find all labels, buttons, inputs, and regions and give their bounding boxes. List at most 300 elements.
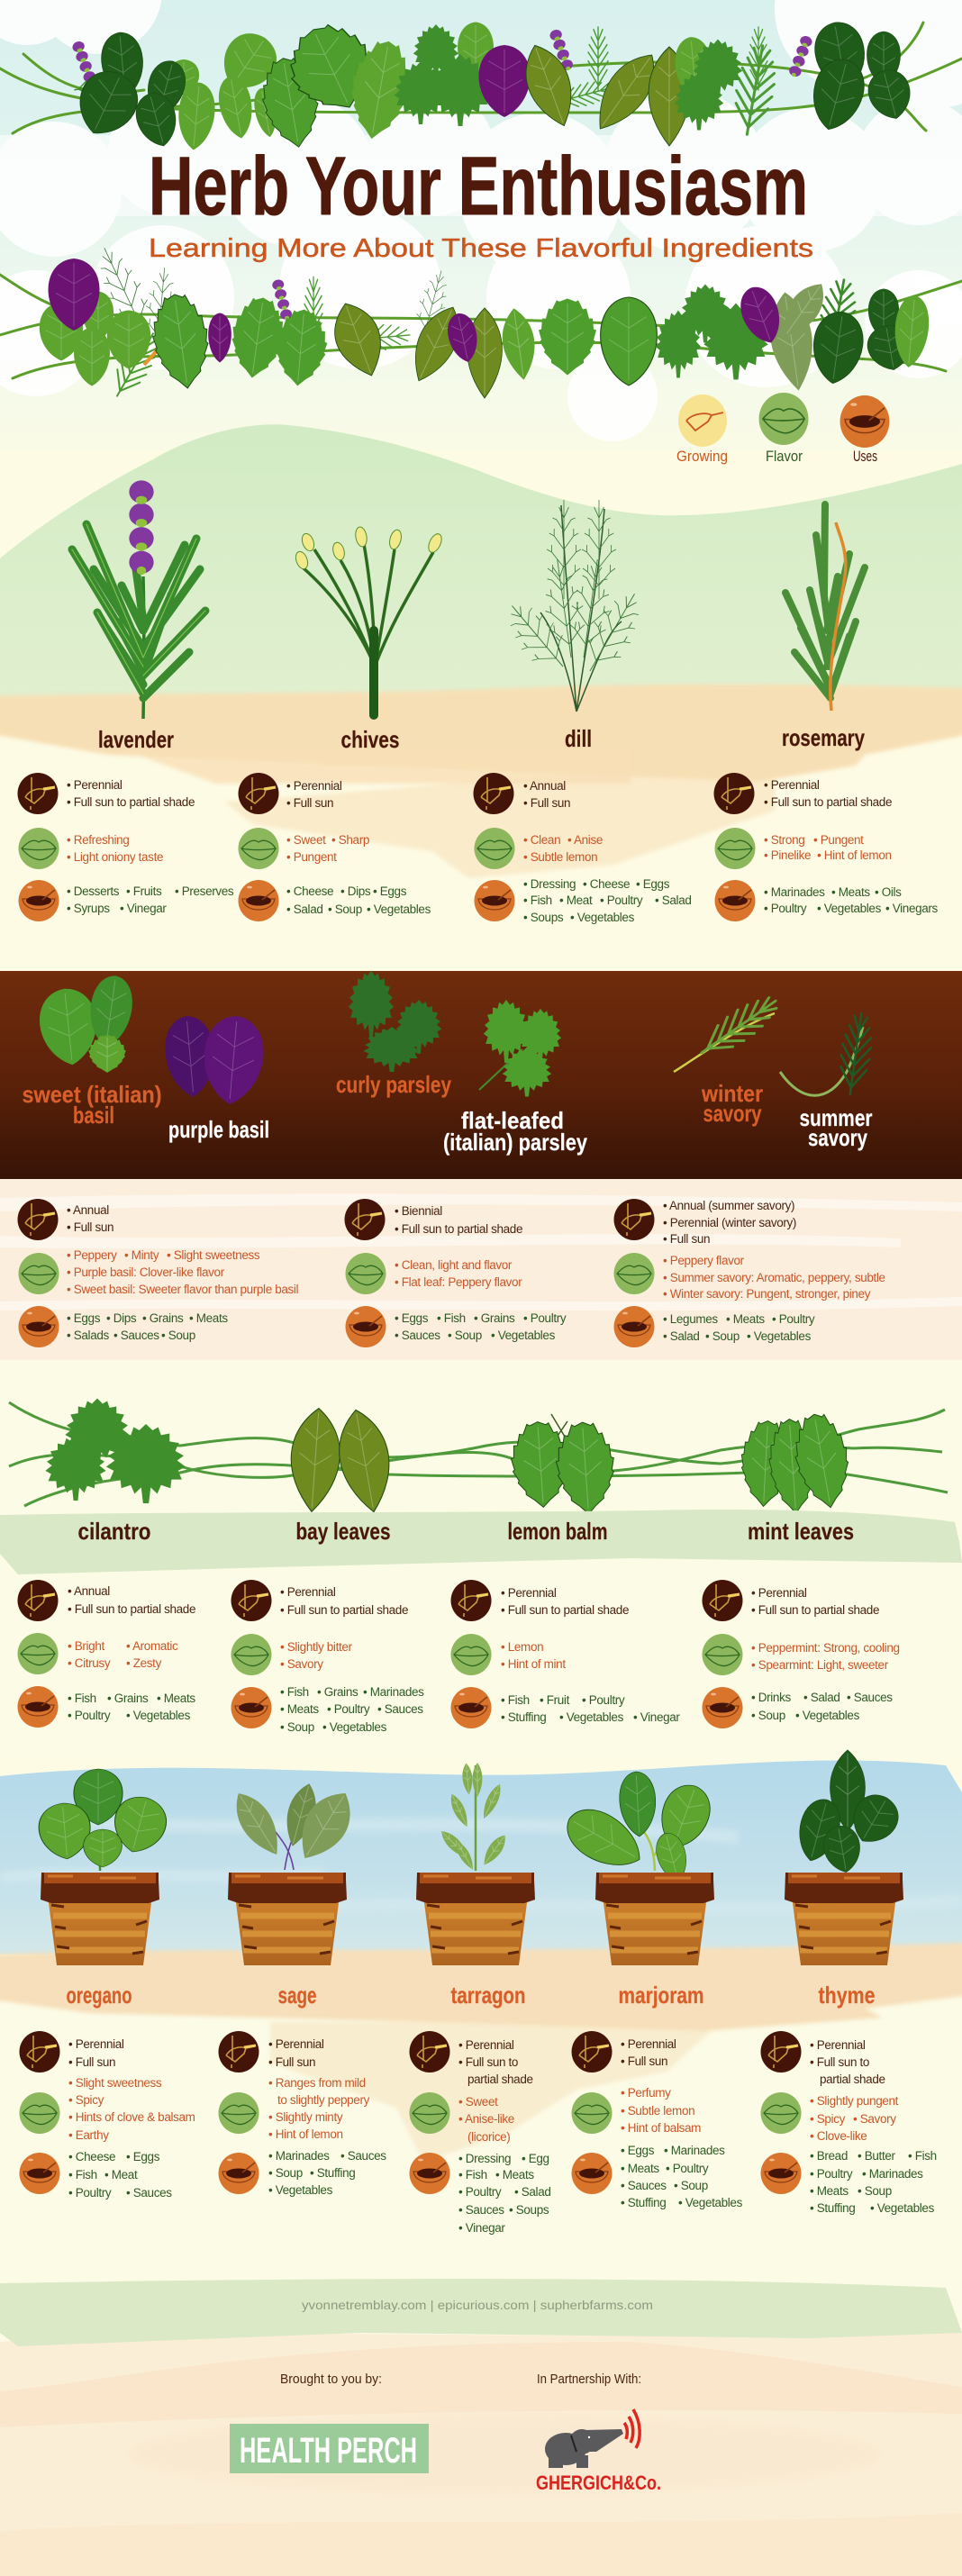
growing text: • Full sun — [663, 1232, 710, 1246]
uses text: • Vegetables — [795, 1709, 860, 1722]
icon: flavor — [715, 828, 755, 869]
icon: uses — [18, 1306, 59, 1347]
uses text: • Vegetables — [367, 903, 431, 916]
growing text: • Perennial — [286, 779, 342, 793]
icon: growing — [218, 2031, 259, 2073]
icon: growing — [409, 2031, 450, 2073]
uses text: • Eggs — [67, 1311, 101, 1325]
info: basil — [18, 1199, 299, 1347]
flavor text: • Peppermint: Strong, cooling — [751, 1641, 900, 1655]
legend: uses — [840, 395, 889, 465]
flavor text: • Slightly pungent — [810, 2094, 899, 2108]
uses text: • Fish — [68, 2168, 97, 2181]
uses text: • Sauces — [395, 1329, 440, 1342]
uses text: • Salad — [803, 1691, 839, 1704]
growing text: • Perennial — [268, 2037, 324, 2051]
flat-leafed parsley — [479, 1000, 561, 1097]
uses text: • Grains — [317, 1685, 358, 1699]
uses text: • Dressing — [523, 877, 576, 891]
icon: flavor — [238, 828, 279, 869]
growing text: • Annual — [523, 779, 566, 793]
winter savory — [674, 989, 784, 1072]
uses text: • Sauces — [377, 1702, 423, 1716]
icon: growing — [18, 773, 58, 814]
uses text: • Stuffing — [621, 2196, 666, 2209]
info: lavender — [18, 773, 234, 921]
name: bay leaves: bay leaves — [295, 1518, 391, 1545]
icon: uses — [614, 1306, 654, 1347]
flavor text: • Subtle lemon — [523, 850, 597, 864]
uses text: • Vegetables — [322, 1720, 387, 1734]
flavor text: • Light oniony taste — [67, 850, 163, 864]
uses text: • Poultry — [523, 1311, 567, 1325]
info: thyme — [760, 2031, 937, 2215]
flavor text: • Peppery — [67, 1248, 117, 1262]
flavor text: • Earthy — [68, 2128, 109, 2142]
name: oregano: oregano — [67, 1982, 132, 2009]
label: sweet italian basil: basil — [73, 1102, 114, 1129]
subtitle: Learning More About These Flavorful Ingredients — [149, 234, 813, 263]
name: sage: sage — [277, 1982, 317, 2009]
logo: Ghergich and Co: GHERGICH&Co. — [536, 2472, 661, 2494]
uses text: • Sauces — [458, 2203, 504, 2217]
growing text: • Perennial — [751, 1586, 807, 1600]
uses text: • Cheese — [583, 877, 630, 891]
uses text: • Dips — [106, 1311, 137, 1325]
name: chives: chives — [340, 726, 400, 753]
icon: growing — [450, 1580, 492, 1621]
uses text: • Drinks — [751, 1691, 791, 1704]
flavor text: • Lemon — [501, 1640, 543, 1654]
flavor text: • Ranges from mild — [268, 2076, 366, 2090]
growing text: • Full sun — [68, 2055, 115, 2069]
growing text: • Perennial — [68, 2037, 124, 2051]
uses text: • Soup — [705, 1329, 740, 1343]
icon: flavor — [18, 1633, 58, 1674]
growing text: • Perennial — [764, 778, 820, 792]
growing text: • Full sun — [523, 796, 570, 810]
uses text: • Fish — [523, 893, 552, 907]
icon: flavor — [571, 2092, 613, 2134]
uses text: • Poultry — [764, 902, 807, 915]
flavor text: • Sweet basil: Sweeter flavor than purple basil — [67, 1283, 299, 1296]
icon: uses — [218, 2153, 259, 2194]
icon: growing — [18, 1580, 58, 1621]
growing text: partial shade — [820, 2073, 885, 2086]
uses text: • Salad — [286, 903, 322, 916]
uses text: • Fish — [458, 2168, 487, 2181]
info: mint leaves — [703, 1580, 900, 1728]
uses text: • Soups — [523, 911, 564, 924]
logo: Health Perch: HEALTH PERCH — [240, 2431, 417, 2471]
uses text: • Butter — [858, 2149, 895, 2163]
icon: growing — [713, 773, 755, 814]
flavor text: • Refreshing — [67, 833, 129, 847]
uses text: • Dips — [340, 884, 371, 898]
growing text: partial shade — [467, 2073, 533, 2086]
flavor text: • Clean, light and flavor — [395, 1258, 513, 1272]
sources: yvonnetremblay.com | epicurious.com | supherbfarms.com — [302, 2298, 653, 2312]
label: sweet italian basil: sweet (italian) — [22, 1081, 162, 1108]
uses text: • Poultry — [772, 1312, 815, 1326]
name: tarragon: tarragon — [450, 1982, 526, 2009]
pot: sage — [226, 1780, 363, 1965]
logo: Ghergich and Co — [536, 2409, 661, 2494]
growing text: • Full sun to partial shade — [395, 1222, 522, 1236]
growing text: • Perennial (winter savory) — [663, 1216, 796, 1229]
icon: growing — [20, 2031, 59, 2073]
flavor text: • Pungent — [813, 833, 864, 847]
uses text: • Fruits — [126, 884, 162, 898]
icon: flavor — [409, 2092, 450, 2134]
flavor text: • Sweet — [286, 833, 326, 847]
flavor text: • Slightly bitter — [280, 1640, 353, 1654]
uses text: • Marinades — [764, 885, 825, 899]
growing text: • Full sun — [67, 1220, 113, 1234]
flavor text: • Strong — [764, 833, 804, 847]
uses text: • Meats — [280, 1702, 319, 1716]
flavor text: • Slight sweetness — [167, 1248, 260, 1262]
plant: cilantro — [45, 1398, 186, 1503]
icon: flavor — [760, 2092, 802, 2134]
icon: uses — [409, 2153, 450, 2194]
name: lemon balm: lemon balm — [508, 1518, 607, 1545]
flavor text: • Anise — [567, 833, 603, 847]
info: oregano — [20, 2031, 195, 2200]
uses text: • Eggs — [373, 884, 407, 898]
uses text: • Vegetables — [126, 1709, 191, 1722]
uses text: • Sauces — [113, 1329, 159, 1342]
curly parsley — [349, 971, 441, 1072]
flavor text: • Citrusy — [68, 1656, 111, 1670]
plant: bay leaves — [287, 1406, 398, 1516]
summer savory — [780, 1011, 876, 1096]
plant: rosemary — [785, 504, 865, 711]
uses text: • Soup — [268, 2166, 303, 2180]
uses text: • Vegetables — [559, 1710, 624, 1724]
name: dill: dill — [565, 725, 592, 752]
uses text: • Stuffing — [501, 1710, 546, 1724]
icon: growing — [238, 773, 279, 814]
plant: chives — [294, 526, 444, 715]
legend: growing: Growing — [676, 448, 728, 465]
pot: thyme — [785, 1750, 906, 1965]
sweet basil leaves — [36, 973, 136, 1073]
background: green hills — [0, 424, 962, 712]
flavor text: • Hints of clove & balsam — [68, 2110, 195, 2124]
uses text: • Eggs — [636, 877, 670, 891]
growing text: • Perennial — [501, 1586, 557, 1600]
uses text: • Desserts — [67, 884, 120, 898]
flavor text: (licorice) — [467, 2130, 510, 2144]
uses text: • Salads — [67, 1329, 109, 1342]
icon: growing — [344, 1199, 386, 1240]
pot: marjoram — [558, 1771, 717, 1965]
flavor text: • Pinelike — [764, 848, 811, 862]
uses text: • Meats — [831, 885, 870, 899]
legend: growing — [676, 395, 728, 465]
uses text: • Eggs — [395, 1311, 429, 1325]
flavor text: • Sweet — [458, 2095, 498, 2109]
uses text: • Stuffing — [310, 2166, 355, 2180]
background: sand brush strokes — [0, 685, 962, 878]
uses text: • Vinegars — [885, 902, 939, 915]
icon: uses — [450, 1687, 492, 1728]
uses text: • Vegetables — [570, 911, 635, 924]
garland: lower herbs — [0, 240, 962, 404]
uses text: • Stuffing — [810, 2201, 855, 2215]
icon: flavor — [18, 828, 59, 869]
uses text: • Meat — [559, 893, 593, 907]
flavor text: • Winter savory: Pungent, stronger, piney — [663, 1287, 871, 1301]
background: ivory base for lower page — [0, 748, 962, 973]
flavor text: • Flat leaf: Peppery flavor — [395, 1275, 522, 1289]
background: sky and clouds — [0, 0, 962, 450]
uses text: • Meat — [104, 2168, 138, 2181]
uses text: • Eggs — [621, 2144, 655, 2157]
pot: oregano — [37, 1769, 172, 1965]
uses text: • Grains — [474, 1311, 515, 1325]
growing text: • Perennial — [810, 2038, 866, 2052]
pot: tarragon — [416, 1763, 535, 1965]
label: flat-leafed italian parsley: (italian) parsley — [443, 1129, 587, 1156]
icon: growing — [231, 1580, 272, 1621]
icon: growing — [18, 1199, 58, 1240]
uses text: • Soup — [280, 1720, 314, 1734]
flavor text: • Hint of mint — [501, 1657, 566, 1671]
flavor text: • Hint of balsam — [621, 2121, 701, 2135]
uses text: • Meats — [189, 1311, 228, 1325]
info: cilantro — [18, 1580, 195, 1728]
info: tarragon — [409, 2031, 551, 2235]
growing text: • Annual — [67, 1203, 109, 1217]
uses text: • Meats — [726, 1312, 765, 1326]
flavor text: • Spicy — [810, 2112, 846, 2126]
logo: Health Perch — [230, 2424, 429, 2473]
flavor text: • Spearmint: Light, sweeter — [751, 1658, 889, 1672]
growing text: • Full sun — [286, 796, 333, 810]
uses text: • Salad — [655, 893, 692, 907]
uses text: • Fish — [501, 1693, 530, 1707]
plant: dill — [496, 500, 653, 712]
uses text: • Cheese — [286, 884, 333, 898]
icon: uses — [346, 1306, 386, 1347]
uses text: • Poultry — [68, 1709, 111, 1722]
info: parsley — [344, 1199, 567, 1347]
icon: uses — [238, 880, 279, 921]
label: flat-leafed italian parsley: flat-leafed — [461, 1107, 564, 1134]
label: summer savory: savory — [808, 1124, 867, 1151]
garland: top herbs — [0, 13, 962, 152]
icon: growing — [474, 773, 513, 814]
growing text: • Perennial — [621, 2037, 676, 2051]
background: green brush strip — [0, 1510, 962, 1574]
flavor text: • Pungent — [286, 850, 337, 864]
info: dill — [474, 773, 692, 924]
flavor text: • Aromatic — [126, 1639, 178, 1653]
icon: flavor — [703, 1634, 742, 1675]
plant: mint leaves — [739, 1410, 856, 1515]
growing text: • Full sun to — [458, 2055, 518, 2069]
name: rosemary: rosemary — [782, 724, 865, 751]
icon: growing — [760, 2031, 802, 2073]
info: chives — [238, 773, 431, 921]
uses text: • Sauces — [621, 2179, 667, 2192]
uses text: • Poultry — [582, 1693, 625, 1707]
flavor text: • Savory — [280, 1657, 323, 1671]
flavor text: • Anise-like — [458, 2112, 514, 2126]
growing text: • Full sun to partial shade — [280, 1603, 408, 1617]
flavor text: • Zesty — [126, 1656, 162, 1670]
uses text: • Sauces — [340, 2149, 386, 2163]
background: footer brushes — [0, 2279, 962, 2576]
uses text: • Vegetables — [491, 1329, 556, 1342]
vines behind leaves — [9, 1402, 948, 1506]
icon: growing — [571, 2031, 613, 2073]
legend: flavor: Flavor — [766, 448, 803, 465]
uses text: • Dressing — [458, 2152, 511, 2165]
label: curly parsley: curly parsley — [336, 1071, 451, 1098]
uses text: • Fish — [68, 1692, 96, 1705]
uses text: • Marinades — [664, 2144, 725, 2157]
flavor text: • Purple basil: Clover-like flavor — [67, 1265, 225, 1279]
icon: uses — [20, 2153, 59, 2194]
uses text: • Poultry — [327, 1702, 370, 1716]
flavor text: • Sharp — [331, 833, 369, 847]
uses text: • Meats — [810, 2184, 849, 2198]
legend — [676, 393, 889, 465]
growing text: • Full sun to partial shade — [751, 1603, 879, 1617]
uses text: • Grains — [142, 1311, 184, 1325]
label: winter savory: winter — [701, 1080, 763, 1107]
icon: flavor — [450, 1634, 492, 1675]
partner label: In Partnership With: — [537, 2372, 641, 2387]
name: marjoram: marjoram — [618, 1982, 704, 2009]
flavor text: • Savory — [853, 2112, 896, 2126]
flavor text: • Slightly minty — [268, 2110, 343, 2124]
uses text: • Legumes — [663, 1312, 718, 1326]
icon: flavor — [20, 2092, 59, 2134]
uses text: • Vinegar — [458, 2221, 505, 2235]
uses text: • Poultry — [666, 2162, 709, 2175]
growing text: • Annual — [68, 1584, 110, 1598]
info: sage — [218, 2031, 386, 2197]
flavor text: • Peppery flavor — [663, 1254, 745, 1267]
uses text: • Meats — [157, 1692, 195, 1705]
icon: uses — [571, 2153, 613, 2194]
uses text: • Soup — [674, 2179, 708, 2192]
uses text: • Grains — [107, 1692, 149, 1705]
uses text: • Bread — [810, 2149, 848, 2163]
flavor text: • Clean — [523, 833, 560, 847]
flavor text: • Hint of lemon — [268, 2127, 343, 2141]
uses text: • Eggs — [126, 2150, 160, 2163]
icon: uses — [18, 880, 59, 921]
icon: uses — [474, 880, 515, 921]
background: peach brush section — [0, 1179, 962, 1761]
uses text: • Poultry — [458, 2185, 502, 2199]
icon: growing — [614, 1199, 654, 1240]
flavor text: to slightly peppery — [277, 2093, 370, 2107]
uses text: • Vegetables — [870, 2201, 935, 2215]
uses text: • Vegetables — [678, 2196, 743, 2209]
sponsor label: Brought to you by: — [280, 2372, 382, 2387]
flavor text: • Clove-like — [810, 2129, 867, 2143]
uses text: • Soup — [751, 1709, 785, 1722]
uses text: • Fruit — [540, 1693, 570, 1707]
panel: dark wood band — [0, 971, 962, 1179]
uses text: • Meats — [495, 2168, 534, 2181]
uses text: • Meats — [621, 2162, 659, 2175]
name: mint leaves: mint leaves — [748, 1518, 854, 1545]
icon: uses — [715, 880, 755, 921]
flavor text: • Spicy — [68, 2093, 104, 2107]
uses text: • Fish — [437, 1311, 466, 1325]
uses text: • Oils — [875, 885, 902, 899]
uses text: • Cheese — [68, 2150, 115, 2163]
flavor text: • Summer savory: Aromatic, peppery, subtle — [663, 1271, 885, 1284]
flavor text: • Bright — [68, 1639, 104, 1653]
uses text: • Soup — [858, 2184, 892, 2198]
uses text: • Soups — [509, 2203, 549, 2217]
uses text: • Vegetables — [747, 1329, 812, 1343]
growing text: • Full sun to partial shade — [501, 1603, 629, 1617]
growing text: • Full sun — [268, 2055, 315, 2069]
uses text: • Soup — [161, 1329, 195, 1342]
background: blue sky brush — [0, 1761, 962, 2576]
uses text: • Poultry — [600, 893, 643, 907]
uses text: • Marinades — [862, 2167, 923, 2181]
growing text: • Biennial — [395, 1204, 442, 1218]
growing text: • Full sun to partial shade — [764, 795, 892, 809]
label: winter savory: savory — [703, 1100, 762, 1127]
background: sand brush — [0, 1943, 962, 2162]
growing text: • Perennial — [280, 1585, 336, 1599]
flavor text: • Perfumy — [621, 2086, 671, 2100]
label: summer savory: summer — [800, 1104, 872, 1131]
uses text: • Vegetables — [268, 2183, 333, 2197]
uses text: • Fish — [908, 2149, 937, 2163]
growing text: • Perennial — [67, 778, 123, 792]
label: purple basil: purple basil — [168, 1116, 269, 1143]
info: rosemary — [713, 773, 939, 921]
flavor text: • Hint of lemon — [817, 848, 892, 862]
icon: flavor — [346, 1253, 386, 1294]
icon: uses — [18, 1686, 58, 1728]
icon: flavor — [18, 1253, 59, 1294]
icon: uses — [760, 2153, 802, 2194]
uses text: • Soup — [448, 1329, 482, 1342]
plant: lemon balm — [509, 1414, 617, 1516]
name: thyme: thyme — [818, 1982, 876, 2009]
info: marjoram — [571, 2031, 743, 2209]
icon: uses — [231, 1687, 272, 1728]
uses text: • Syrups — [67, 902, 110, 915]
uses text: • Fish — [280, 1685, 309, 1699]
legend: flavor — [759, 393, 808, 465]
flavor text: • Subtle lemon — [621, 2104, 694, 2118]
uses text: • Marinades — [363, 1685, 424, 1699]
icon: flavor — [231, 1634, 272, 1675]
uses text: • Vinegar — [633, 1710, 680, 1724]
uses text: • Sauces — [126, 2186, 172, 2200]
purple basil leaves — [162, 1013, 267, 1107]
flavor text: • Slight sweetness — [68, 2076, 162, 2090]
name: cilantro: cilantro — [77, 1518, 151, 1545]
info: lemon balm — [450, 1580, 680, 1728]
uses text: • Vinegar — [120, 902, 167, 915]
growing text: • Full sun to partial shade — [67, 795, 195, 809]
